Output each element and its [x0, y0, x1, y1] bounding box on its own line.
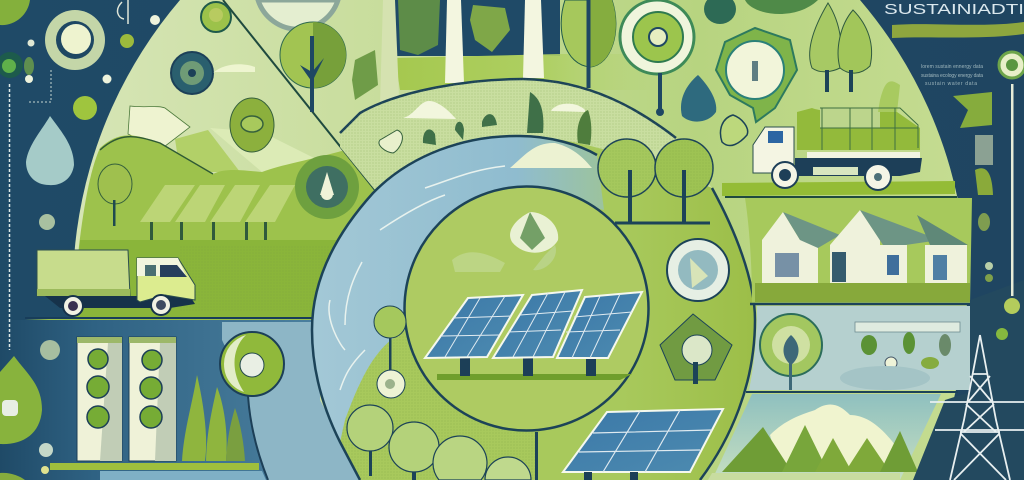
- panel: arc band: [340, 79, 712, 190]
- river highlights: [329, 166, 505, 390]
- icon: leaf emblem: [760, 314, 822, 390]
- foliage: left: [398, 0, 440, 55]
- icon: top magnifier ring: [258, 0, 338, 29]
- ground line: [25, 317, 312, 319]
- caption text: [921, 64, 983, 87]
- small dots: [120, 34, 134, 48]
- panel: navy right wedge: [913, 280, 1024, 480]
- cabinets: battery units: [77, 337, 176, 461]
- icon: small egg: [720, 115, 748, 146]
- tower: white left: [445, 0, 464, 83]
- icon: right column glyphs: [975, 135, 993, 282]
- icon: top left badge: [0, 0, 30, 25]
- icon: map leaf: [953, 92, 992, 128]
- icon: sun eye: [171, 52, 255, 94]
- crop row trunks: [150, 222, 267, 240]
- tree: top left round: [280, 22, 346, 112]
- icon: small dots lower: [40, 340, 60, 360]
- trees: pair right of river: [598, 139, 713, 224]
- house two: [830, 210, 940, 283]
- title: SUSTAINIADTI: [884, 1, 1024, 18]
- clouds: [403, 101, 456, 119]
- trees: lower meadow row: [347, 405, 531, 480]
- icon: water drop: [26, 116, 74, 185]
- icon: small top badge: [704, 0, 736, 24]
- icon: dotted disc badge: [716, 28, 797, 122]
- icon: green drop: [0, 356, 42, 444]
- icon: left leaf badge: [0, 52, 23, 78]
- solar panel right: [557, 292, 642, 358]
- icon: teal leaf drop: [681, 75, 716, 122]
- solar panel supports: [460, 358, 596, 376]
- icon: compass badge: [667, 239, 729, 301]
- icon: recycle badge: [220, 332, 284, 396]
- tower: thin left: [380, 0, 399, 105]
- panel divider line: [223, 0, 375, 190]
- icon: small lens: [39, 214, 55, 230]
- tree: hillside: [98, 164, 132, 226]
- icon: right badge: [996, 52, 1024, 340]
- panel: rolling hills landscape: [25, 106, 375, 320]
- icon: target tree badge: [620, 0, 694, 116]
- panel: mountains landscape: [708, 394, 941, 480]
- tower: white right: [523, 0, 544, 78]
- truck: left delivery: [37, 250, 195, 316]
- solar panel centre: [493, 290, 582, 358]
- panel: solar inner circle: [404, 186, 648, 430]
- house three: [880, 215, 968, 283]
- panel: irrigation pale blue: [746, 306, 971, 392]
- icon: central leaf drop: [452, 212, 558, 272]
- caption text: sustaina ecology energy data: [921, 73, 983, 79]
- foliage: centre: [470, 5, 510, 52]
- shelf bar: [50, 463, 259, 470]
- caption text: sustain water data: [925, 81, 977, 87]
- solar panel: lower: [563, 409, 723, 480]
- crop rows: [140, 185, 295, 222]
- icon: dotted ring: [45, 10, 105, 70]
- left column decoration: [0, 0, 160, 480]
- panel: top row with towers: [352, 0, 690, 105]
- irrigation pipe: [855, 322, 960, 369]
- trees: conifers: [182, 375, 245, 461]
- truck: green cargo right: [722, 3, 957, 197]
- icon: top partial wreath: [745, 0, 818, 14]
- icon: green ball: [73, 96, 97, 120]
- icon: pylon: [930, 335, 1024, 480]
- cloud on river: [510, 143, 592, 168]
- solar panel left: [425, 295, 523, 358]
- icon: node on river: [374, 306, 406, 398]
- dark divider arcs: [248, 396, 268, 480]
- caption text: lorem sustain ennergy data: [921, 64, 983, 70]
- ring outlines: [312, 136, 755, 480]
- panel: houses: [745, 198, 972, 304]
- icon: tree badge: [660, 314, 732, 384]
- band trees: [423, 92, 543, 145]
- house one: [762, 212, 840, 283]
- icon: small green badge: [201, 2, 231, 32]
- panel: river and meadow ring: [312, 136, 755, 480]
- panel: lower left blue section: [0, 320, 362, 480]
- dashed line: [8, 84, 10, 350]
- tree pair above truck: [810, 3, 872, 92]
- icon: lock badge: [295, 155, 359, 219]
- icon: leaf egg badge: [230, 98, 274, 152]
- tree: top centre: [561, 0, 616, 88]
- title underline band: [892, 22, 1024, 38]
